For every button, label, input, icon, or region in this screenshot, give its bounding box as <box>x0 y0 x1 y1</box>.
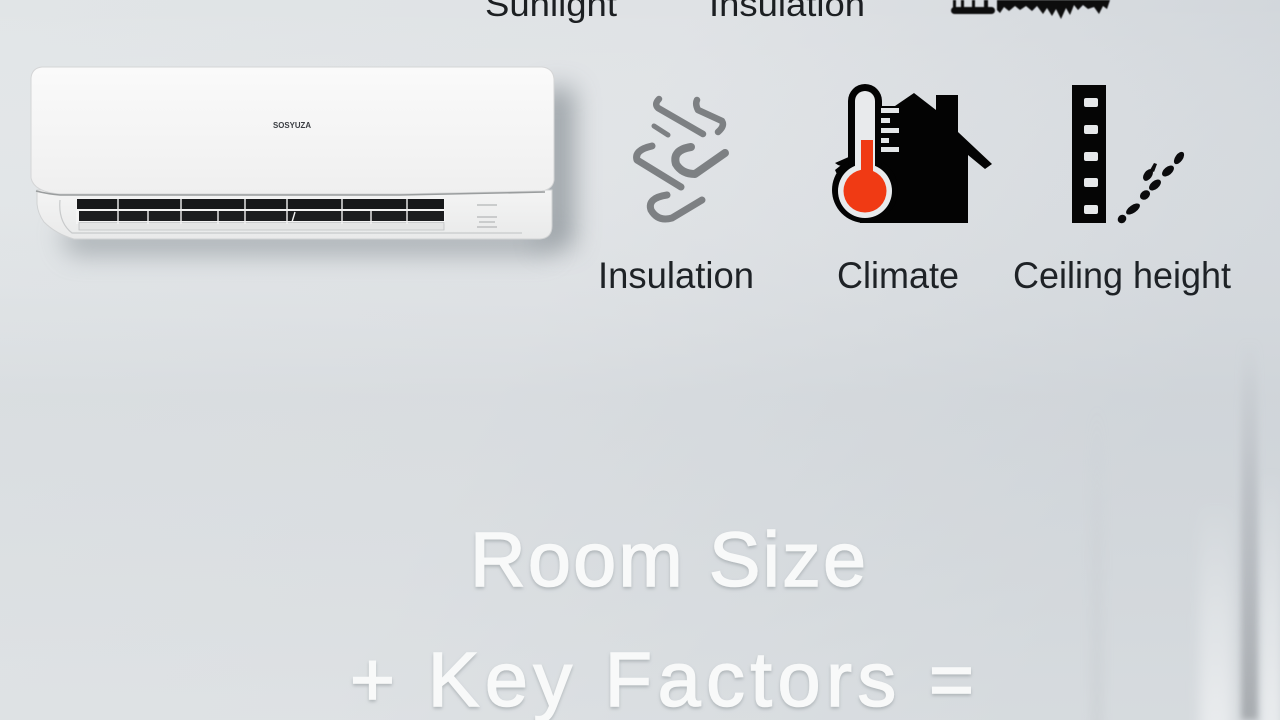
front panel <box>31 67 554 194</box>
cropped black icon at top <box>951 0 1110 19</box>
factor: ceiling height <box>1013 85 1232 296</box>
icon: ruler and dotted diagonal <box>1072 85 1186 225</box>
icon: insulation coils <box>637 99 725 219</box>
top row cropped labels <box>485 0 1110 24</box>
label: Ceiling height: Ceiling height <box>1013 255 1232 296</box>
icon: house with thermometer <box>832 84 992 223</box>
factor: insulation <box>598 99 754 296</box>
headline line 1: Room Size <box>470 517 866 603</box>
label: Climate: Climate <box>837 255 959 296</box>
unit shadow <box>60 228 552 254</box>
headline <box>350 517 974 720</box>
air vent louvres <box>76 198 445 230</box>
lower body <box>37 190 552 239</box>
factor: climate <box>832 84 992 296</box>
label: Insulation: Insulation <box>598 255 754 296</box>
brand logo: SOSYUZA <box>273 120 311 130</box>
air conditioner unit <box>31 67 574 254</box>
control labels <box>477 205 497 227</box>
